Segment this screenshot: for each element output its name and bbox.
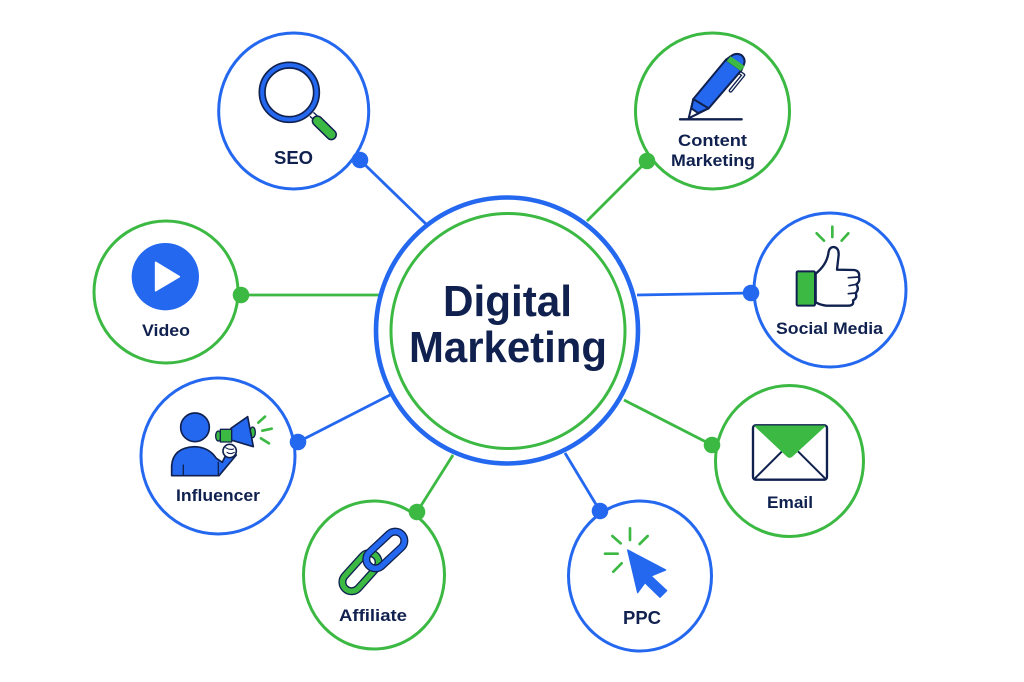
connector: PPC	[565, 453, 600, 511]
node: Influencer	[141, 378, 306, 534]
connector: Email	[624, 400, 712, 445]
hub title: Digital	[443, 277, 572, 326]
node: Social Media	[743, 213, 906, 367]
node: Email	[704, 386, 864, 536]
node ring	[568, 501, 712, 651]
connector dot	[233, 287, 249, 303]
icon: play button	[132, 243, 199, 310]
node: SEO	[219, 33, 369, 189]
node: Affiliate	[304, 501, 444, 649]
label	[671, 131, 755, 170]
central hub	[376, 198, 638, 464]
connector dot	[704, 437, 720, 453]
connector dot	[290, 434, 306, 450]
icon: person with megaphone	[172, 413, 272, 476]
connector dot	[592, 503, 608, 519]
label: PPC	[623, 608, 661, 628]
node ring	[141, 378, 295, 534]
label: Social Media	[776, 319, 884, 338]
connector: Content Marketing	[587, 161, 647, 221]
node ring	[94, 221, 238, 363]
hub outer ring	[376, 198, 638, 464]
connector: Video	[241, 294, 380, 296]
node ring	[754, 213, 906, 367]
icon: envelope	[753, 425, 827, 480]
node ring	[304, 501, 444, 649]
label: Marketing	[671, 151, 755, 170]
icon: cursor click	[605, 528, 667, 597]
label: Influencer	[176, 486, 260, 505]
hub inner ring	[391, 214, 625, 448]
label: SEO	[274, 148, 313, 168]
icon: thumbs up	[797, 227, 859, 306]
hub title	[409, 277, 607, 372]
icon: chain links	[339, 528, 408, 595]
label: Email	[767, 493, 813, 512]
connector dot	[352, 152, 368, 168]
connector: Influencer	[298, 395, 390, 442]
label: Affiliate	[339, 606, 407, 625]
node ring	[636, 33, 790, 189]
connector dot	[743, 285, 759, 301]
label: Video	[142, 321, 190, 340]
node ring	[219, 33, 369, 189]
hub title: Marketing	[409, 323, 607, 372]
icon: pen	[680, 54, 745, 119]
connector: Affiliate	[417, 455, 453, 512]
node: PPC	[568, 501, 712, 651]
icon: magnifying glass	[259, 62, 331, 135]
connector: SEO	[360, 160, 426, 224]
node ring	[716, 386, 864, 536]
node: Video	[94, 221, 249, 363]
label: Content	[678, 131, 747, 150]
connector dot	[409, 504, 425, 520]
connector: Social Media	[637, 293, 751, 295]
connector dot	[639, 153, 655, 169]
node: Content Marketing	[636, 33, 790, 189]
